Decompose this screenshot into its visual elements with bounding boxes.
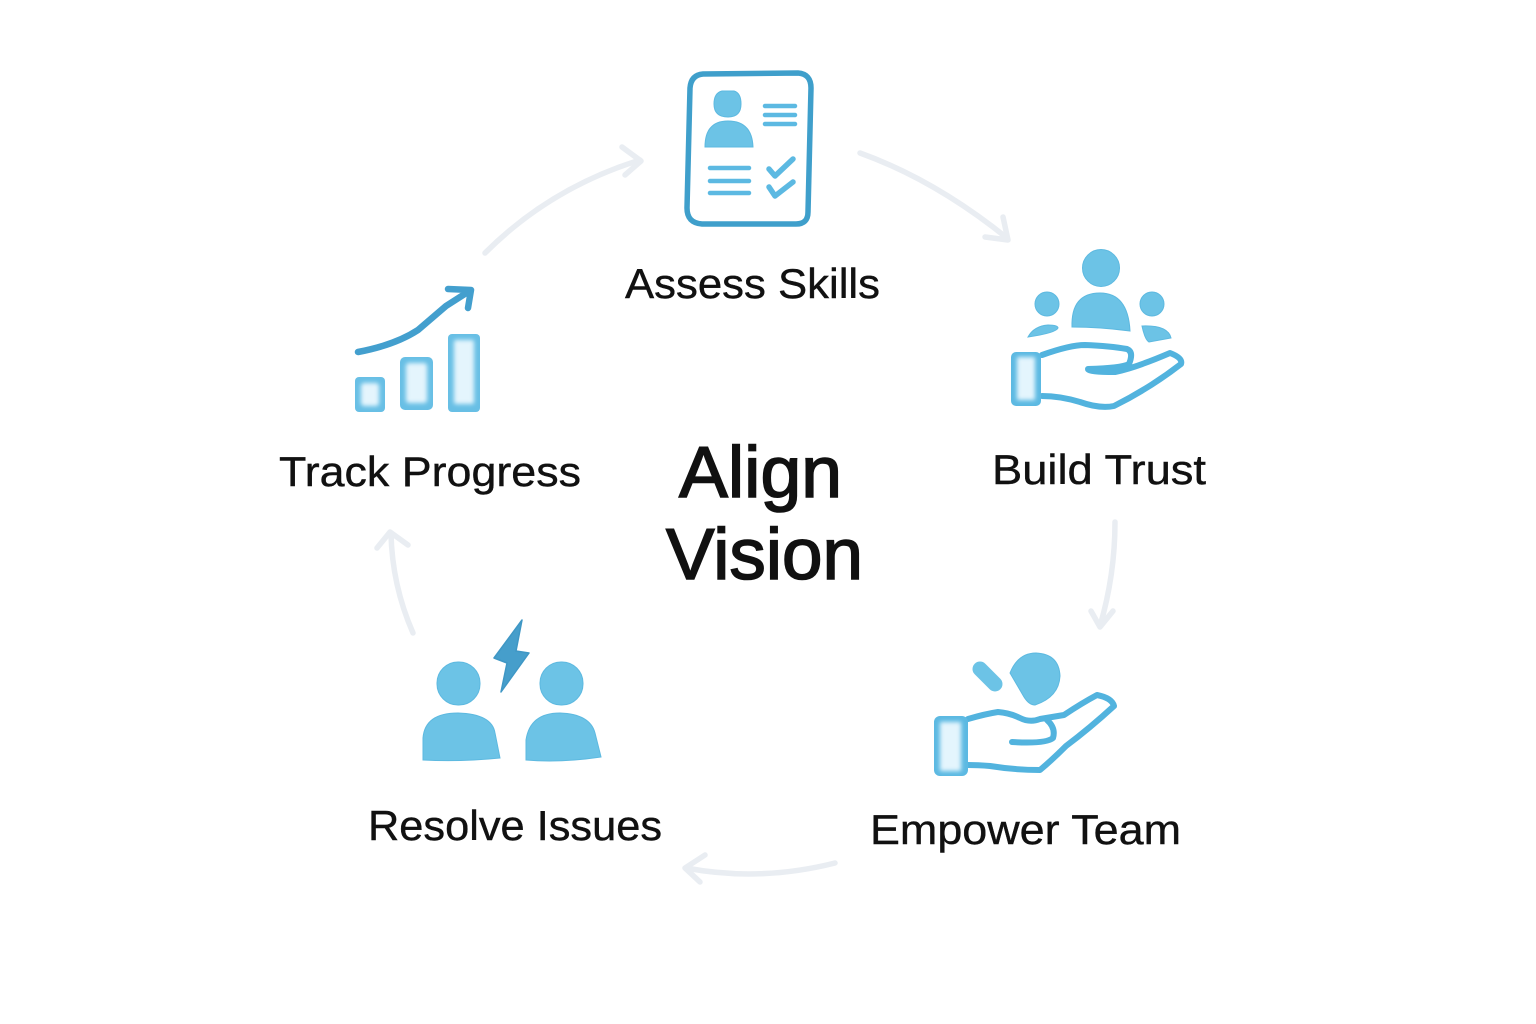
label: track progress: Track Progress xyxy=(279,448,581,495)
bars xyxy=(355,377,385,412)
document outline xyxy=(687,73,811,224)
hand xyxy=(1042,345,1181,407)
arrow: assess skills to build trust xyxy=(860,153,1008,240)
hand xyxy=(968,695,1114,770)
icon: conflict between two people xyxy=(423,620,601,761)
left person xyxy=(437,662,480,705)
ball xyxy=(1010,653,1060,705)
arrow: resolve issues to track progress xyxy=(377,532,413,633)
arrow: build trust to empower team xyxy=(1091,522,1115,627)
right person xyxy=(540,662,583,705)
cuff xyxy=(1011,352,1041,406)
people xyxy=(1082,250,1120,286)
icon: skills document xyxy=(687,73,811,224)
center title: Vision xyxy=(666,515,863,595)
arrow: empower team to resolve issues xyxy=(685,855,835,882)
arrow: track progress to assess skills xyxy=(485,147,641,253)
icon: growth chart xyxy=(355,289,480,412)
person xyxy=(705,91,753,147)
icon: people over hand xyxy=(1011,250,1181,407)
center title: Align xyxy=(679,433,842,513)
check marks xyxy=(769,159,793,196)
cuff xyxy=(934,716,968,776)
lightning bolt xyxy=(494,620,529,692)
center title xyxy=(666,433,863,595)
text lines xyxy=(710,106,795,193)
label: assess skills: Assess Skills xyxy=(625,260,880,307)
label: empower team: Empower Team xyxy=(870,806,1181,853)
label: build trust: Build Trust xyxy=(992,446,1206,493)
label: resolve issues: Resolve Issues xyxy=(368,802,662,849)
dash xyxy=(980,669,995,684)
icon: empower hand xyxy=(934,653,1114,776)
rising arrow xyxy=(358,289,471,352)
